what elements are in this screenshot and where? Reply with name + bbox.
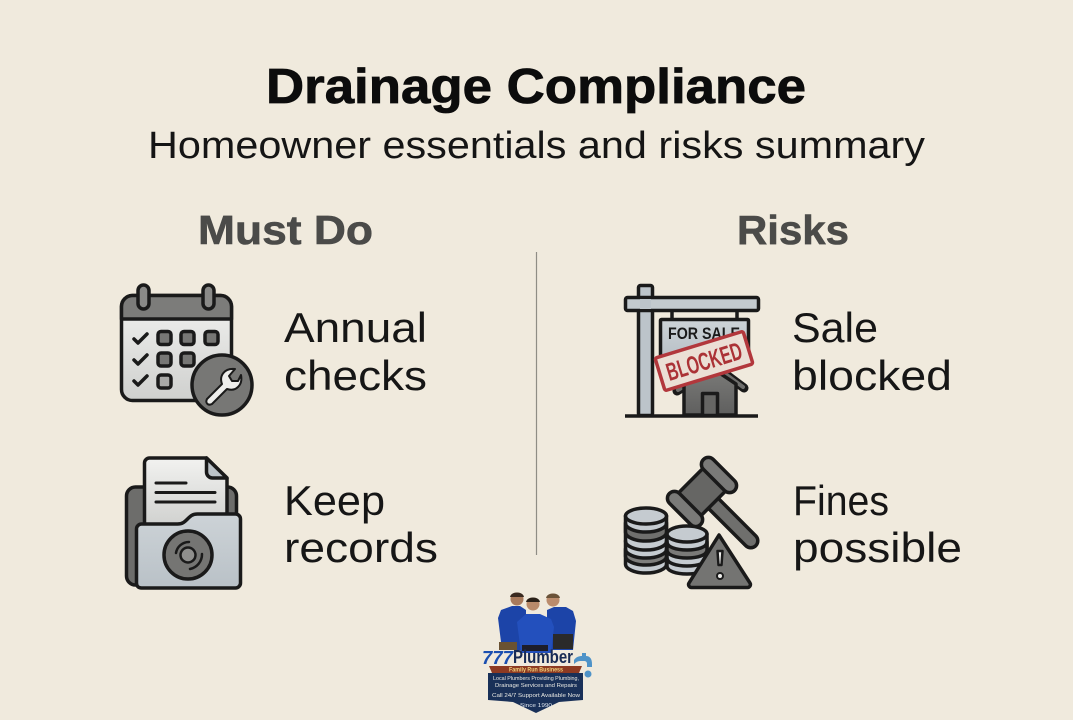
- title: Drainage Compliance: [266, 60, 806, 114]
- faucet: [574, 653, 592, 667]
- logo: 777Plumber: Drainage Services and Repairs: [495, 683, 577, 689]
- plumbers: [498, 592, 576, 653]
- icon: document folder: [126, 458, 240, 588]
- label: Keep records: Keep: [284, 477, 385, 524]
- banner: [489, 666, 582, 673]
- icon: calendar with wrench: [122, 285, 252, 415]
- label: Sale blocked: [792, 304, 952, 399]
- subtitle: Homeowner essentials and risks summary: [148, 125, 925, 167]
- icon: for sale sign blocked: [625, 286, 758, 416]
- logo: 777Plumber: Family Run Business: [509, 666, 563, 674]
- label: Annual checks: [284, 304, 427, 399]
- stamp: BLOCKED: [655, 331, 753, 391]
- heading: Must Do: Must Do: [198, 207, 373, 253]
- wordmark name: Plumber: [513, 647, 573, 667]
- logo: 777Plumber: Call 24/7 Support Available Now: [492, 693, 580, 699]
- icon: gavel, coins and warning: [626, 455, 778, 588]
- heading: Risks: Risks: [737, 207, 849, 253]
- label: Annual checks: Annual: [284, 304, 427, 351]
- water drop: [584, 670, 592, 678]
- first coin stack: [626, 508, 666, 573]
- label: Fines possible: [793, 477, 962, 571]
- stamp: BLOCKED: BLOCKED: [663, 337, 746, 387]
- wordmark number: 777: [482, 648, 514, 668]
- badge tag: Since 1990: [520, 703, 552, 709]
- second coin stack: [667, 526, 707, 574]
- label: Sale blocked: Sale: [792, 304, 878, 351]
- logo: 777Plumber: Local Plumbers Providing Plumbing,: [493, 676, 579, 682]
- label: Sale blocked: blocked: [792, 352, 952, 399]
- label: Annual checks: checks: [284, 352, 427, 399]
- label: Fines possible: Fines: [793, 477, 889, 524]
- label: Keep records: records: [284, 524, 438, 571]
- label: Keep records: [284, 477, 438, 571]
- badge: [488, 673, 583, 713]
- logo: 777Plumber: [482, 592, 592, 713]
- label: Fines possible: possible: [793, 524, 962, 571]
- text: FOR SALE: FOR SALE: [668, 325, 740, 343]
